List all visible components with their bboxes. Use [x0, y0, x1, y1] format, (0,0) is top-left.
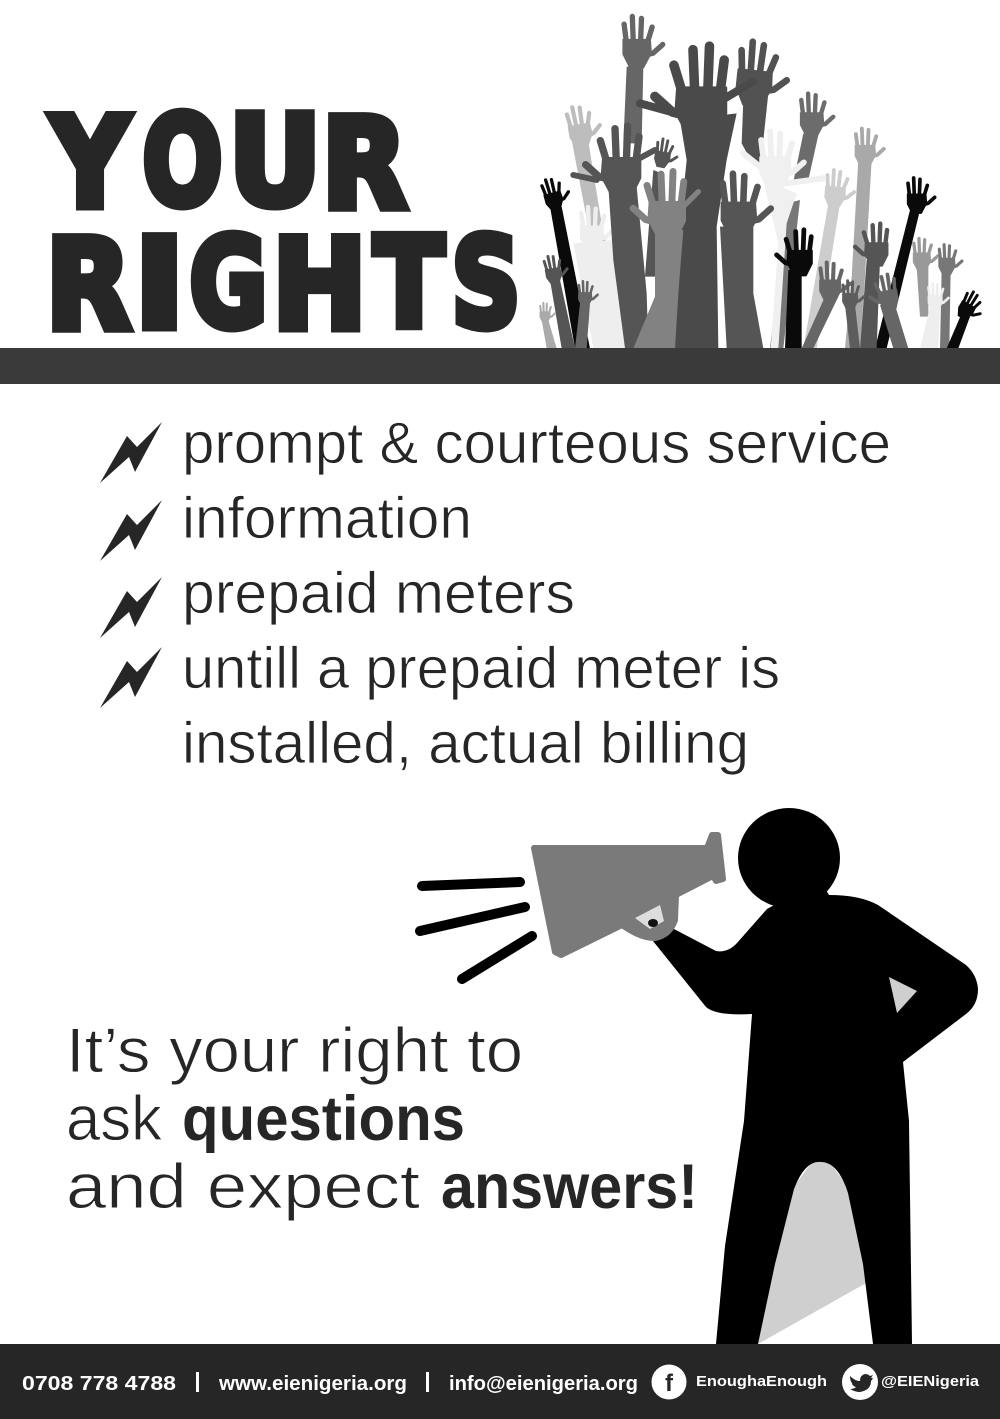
icon: facebook: f — [665, 1370, 674, 1397]
hand: pale gray right — [803, 169, 856, 348]
icon: lightning bolt 4 — [100, 647, 162, 708]
head — [738, 808, 840, 908]
hand: mid gray center left — [633, 172, 698, 348]
website: www.eienigeria.org — [218, 1373, 407, 1395]
hand: black right tall — [875, 178, 935, 348]
hand: white left — [573, 207, 625, 348]
hand: gray tallest — [623, 16, 663, 143]
megaphone thumb — [648, 919, 658, 927]
sound lines — [420, 882, 532, 979]
icon: lightning bolt 3 — [100, 577, 162, 638]
hand: white center — [743, 131, 823, 348]
list item 1: prompt & courteous service — [182, 411, 891, 476]
title: YOUR RIGHTS: I — [134, 213, 184, 357]
slogan — [66, 1016, 698, 1222]
hand: black center right — [777, 230, 812, 348]
footer contacts — [22, 1364, 980, 1400]
title: YOUR RIGHTS: R — [322, 93, 407, 237]
megaphone — [534, 835, 723, 955]
hand: dark left large — [573, 126, 655, 348]
slogan line 3: answers! — [441, 1152, 698, 1222]
title: YOUR RIGHTS: U — [229, 90, 321, 234]
hand: dark upper right — [735, 41, 790, 165]
hand: gray small left — [575, 281, 598, 348]
arm: gray behind white hand — [770, 200, 800, 348]
hand: small dark right — [843, 281, 864, 348]
icon: facebook — [652, 1364, 686, 1400]
hand: black far left — [540, 175, 590, 348]
list item 3: prepaid meters — [182, 561, 575, 626]
person silhouette — [653, 880, 978, 1344]
rights list — [182, 411, 891, 776]
title: YOUR RIGHTS — [46, 90, 520, 358]
slogan line 2: questions — [182, 1084, 465, 1154]
slogan line 2: ask — [66, 1084, 162, 1154]
hand: gray right of center — [793, 94, 833, 182]
title: YOUR RIGHTS: O — [142, 90, 222, 234]
illustration: person with megaphone — [420, 808, 978, 1344]
leg shadow — [758, 1150, 868, 1344]
hand: largest center — [640, 46, 753, 348]
icon: twitter — [842, 1364, 878, 1400]
slogan line 3: and expect — [66, 1152, 421, 1222]
megaphone handle opening — [635, 905, 664, 929]
icon: lightning bolt 2 — [100, 500, 162, 561]
title: YOUR RIGHTS: H — [272, 214, 366, 358]
illustration: raised hands — [540, 16, 988, 348]
phone: 0708 778 4788 — [22, 1373, 176, 1395]
separator — [426, 1372, 429, 1392]
list item 4 line 1: untill a prepaid meter is — [182, 636, 780, 701]
separator — [196, 1372, 199, 1392]
footer bar — [0, 1344, 1000, 1419]
hand: light gray right — [845, 129, 884, 348]
slogan line 2 — [66, 1084, 465, 1154]
icon: lightning bolt 1 — [100, 422, 162, 483]
title: YOUR RIGHTS: R — [46, 214, 131, 358]
title: YOUR RIGHTS: G — [190, 212, 268, 356]
hand: small gray right — [867, 273, 908, 348]
list item 4 line 2: installed, actual billing — [182, 711, 749, 776]
hand: gray far right — [939, 245, 962, 348]
hand: light tiny left — [540, 303, 557, 348]
title: YOUR RIGHTS: S — [452, 212, 520, 356]
hand: dark small left — [543, 253, 575, 348]
header bar — [0, 348, 1000, 384]
twitter handle: @EIENigeria — [881, 1373, 980, 1390]
hand: black far right — [947, 289, 988, 348]
facebook handle: EnoughaEnough — [696, 1373, 827, 1390]
hand: small dark behind — [645, 138, 680, 277]
list item 2: information — [182, 486, 472, 551]
hand: light gray back left — [565, 103, 625, 327]
hand: gray lower right — [802, 262, 850, 348]
title: YOUR RIGHTS: Y — [49, 92, 130, 236]
title: YOUR RIGHTS: T — [374, 212, 444, 356]
hip gap — [889, 977, 917, 1013]
hand: gray mid right — [913, 239, 938, 317]
slogan line 1: It’s your right to — [66, 1016, 523, 1086]
hand: dark right — [855, 224, 888, 348]
hand: white far right — [920, 283, 948, 348]
email: info@eienigeria.org — [449, 1373, 638, 1395]
slogan line 3 — [66, 1152, 698, 1222]
hand: dark center right — [720, 174, 771, 348]
